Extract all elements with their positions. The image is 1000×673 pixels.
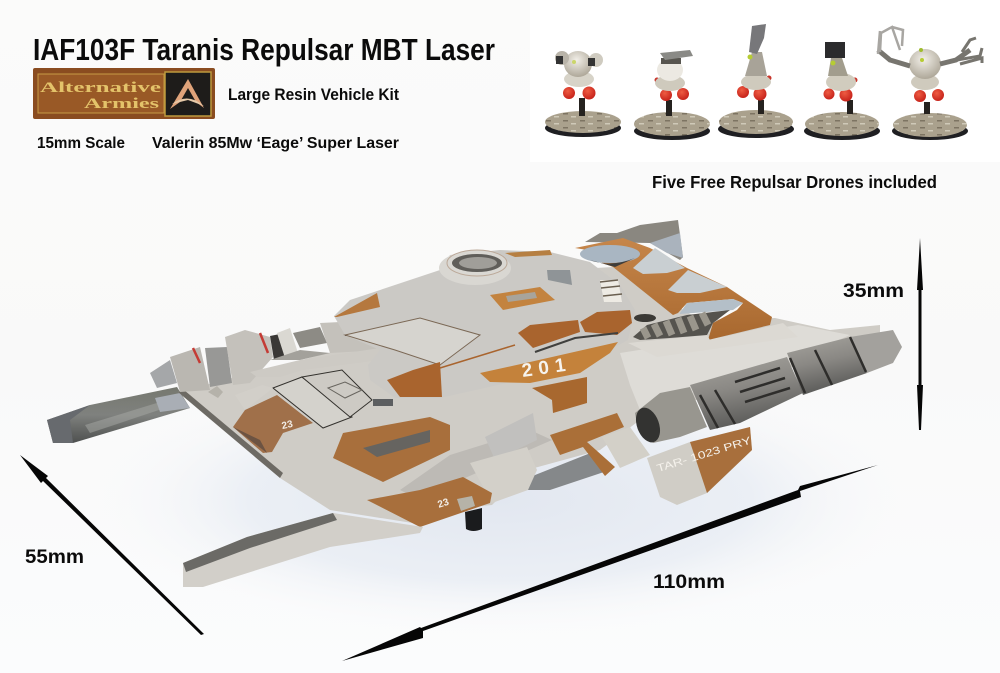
weapon label: Valerin 85Mw ‘Eage’ Super Laser [152,135,399,152]
brown lower panel 23: 23 [436,497,451,511]
fin [647,427,753,505]
brown panel 23 [233,395,313,453]
title: IAF103F Taranis Repulsar MBT Laser [33,32,495,67]
front deck panels [208,370,393,428]
table shadow [80,365,920,635]
gun barrel [150,320,385,392]
brown lower panel 23 [367,477,492,527]
central blocks [400,430,552,500]
front spike [183,513,423,587]
turret armour panels [334,293,380,317]
turret [334,250,635,398]
pin [465,508,482,531]
drone 3 [718,24,794,138]
scale label: 15mm Scale [37,135,125,152]
drone 2 [634,50,710,140]
engine [632,330,902,446]
centre brown strip [532,377,587,413]
width label: 55mm [25,547,84,568]
drone 5 [878,27,982,140]
logo: Alternative Armies: Armies [84,96,159,112]
drones caption: Five Free Repulsar Drones included [652,172,937,192]
drone 4 [804,42,880,140]
kit type label: Large Resin Vehicle Kit [228,85,399,104]
brown slot panel [333,417,450,482]
logo emblem [165,72,211,116]
rear orange deck [575,238,772,340]
vent [628,310,798,357]
fin: TAR- 1023 PRY [655,435,753,475]
logo: Alternative Armies: Alternative [40,80,162,96]
arrow: height [917,238,923,430]
201 plate [480,342,618,383]
tank model [47,220,902,587]
logo: Alternative Armies [33,68,215,119]
under hull shadow [528,452,610,490]
rear pods [585,220,683,260]
spine beam [620,325,850,410]
arrow: width [20,455,204,635]
brown panel 23: 23 [281,419,294,432]
height label: 35mm [843,281,904,302]
201 plate: 201 [520,355,567,382]
panel: drone photo [530,0,1000,162]
brown T bracket [550,413,624,476]
arrow: length [342,465,878,661]
length label: 110mm [653,572,725,593]
drone 1 [545,51,621,137]
main hull deck [178,267,880,525]
left rod [47,387,190,443]
